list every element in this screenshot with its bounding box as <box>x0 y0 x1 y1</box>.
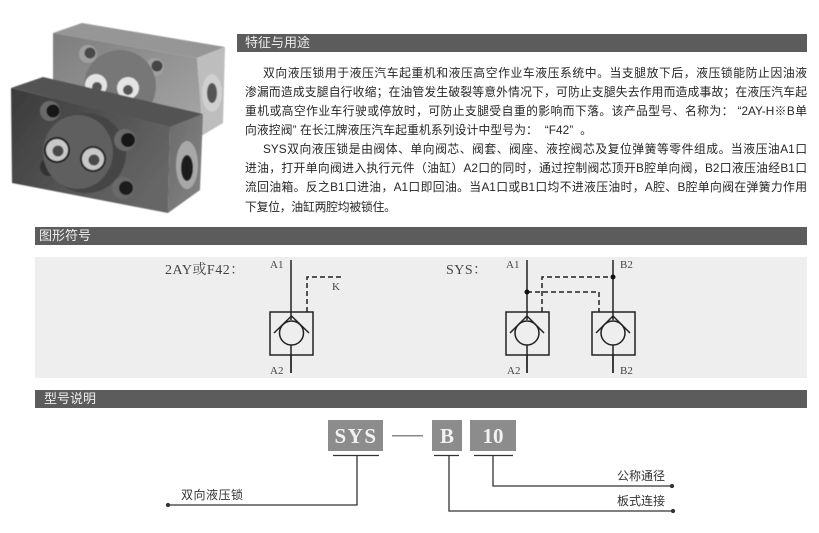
diagram: SYS symbol: SYS： <box>446 263 488 278</box>
diagram: SYS symbol: B2 <box>620 259 633 271</box>
text block: description: 流回油箱。反之B1口进油，A1口即回油。当A1口或B1口均不进液压油时，A腔、B腔单向阀在弹簧力作用 <box>245 180 807 194</box>
diagram: 2AY or F42 symbol: A2 <box>270 365 283 377</box>
front block <box>11 77 203 127</box>
diagram: 2AY or F42 symbol: A1 <box>270 259 283 271</box>
diagram: 2AY or F42 symbol: 2AY或F42： <box>165 262 245 278</box>
code box: 10: 10 <box>482 424 504 448</box>
text block: description: 渗漏而造成支腿自行收缩；在油管发生破裂等意外情况下，可防止支腿失去作用而造成事故；在液压汽车起 <box>245 85 807 99</box>
dash <box>392 435 423 436</box>
leader: hydraulic lock <box>166 456 379 506</box>
heading: features and uses: 特征与用途 <box>245 35 310 50</box>
heading: graphic symbols: 图形符号 <box>39 228 91 243</box>
product photo: two hydraulic lock blocks <box>10 22 226 214</box>
text block: description: 重机或高空作业车行驶或停放时，可防止支腿受自重的影响而下落。该产品型号、名称为： “2AY-H※B单 <box>245 104 807 118</box>
text block: description: 向液控阀” 在长江牌液压汽车起重机系列设计中型号为： “F42” 。 <box>245 123 592 137</box>
code box: B <box>432 420 462 451</box>
leader: plate connection <box>434 456 674 512</box>
text block: description: 双向液压锁用于液压汽车起重机和液压高空作业车液压系统中。当支腿放下后，液压锁能防止因油液 <box>263 66 807 80</box>
heading: features and uses <box>237 34 807 52</box>
panel: graphic symbols <box>35 257 807 378</box>
diagram: 2AY or F42 symbol: K <box>332 281 340 293</box>
diagram: SYS symbol: B2 <box>620 365 633 377</box>
code box: SYS: SYS <box>334 424 378 448</box>
text block: description: 下复位，油缸两腔均被锁住。 <box>245 200 396 214</box>
label: nominal diameter: 公称通径 <box>617 469 665 483</box>
diagram: SYS symbol: A2 <box>507 365 520 377</box>
heading: model description <box>35 390 807 408</box>
code box: B: B <box>440 424 454 448</box>
heading: graphic symbols <box>35 227 807 245</box>
code box: 10 <box>470 420 516 451</box>
leader: nominal diameter <box>474 456 674 488</box>
label: hydraulic lock: 双向液压锁 <box>181 487 244 502</box>
back block <box>53 23 225 58</box>
code box: SYS <box>328 420 383 451</box>
label: plate connection: 板式连接 <box>617 493 665 508</box>
text block: description <box>245 66 807 214</box>
heading: model description: 型号说明 <box>44 391 96 406</box>
text block: description: SYS双向液压锁是由阀体、单向阀芯、阀套、阀座、液控阀芯及复位弹簧等零件组成。当液压油A1口 <box>263 142 807 156</box>
text block: description: 进油，打开单向阀进入执行元件（油缸）A2口的同时，通过控制阀芯顶开B腔单向阀，B2口液压油经B1口 <box>245 161 807 175</box>
diagram: SYS symbol: A1 <box>506 259 519 271</box>
